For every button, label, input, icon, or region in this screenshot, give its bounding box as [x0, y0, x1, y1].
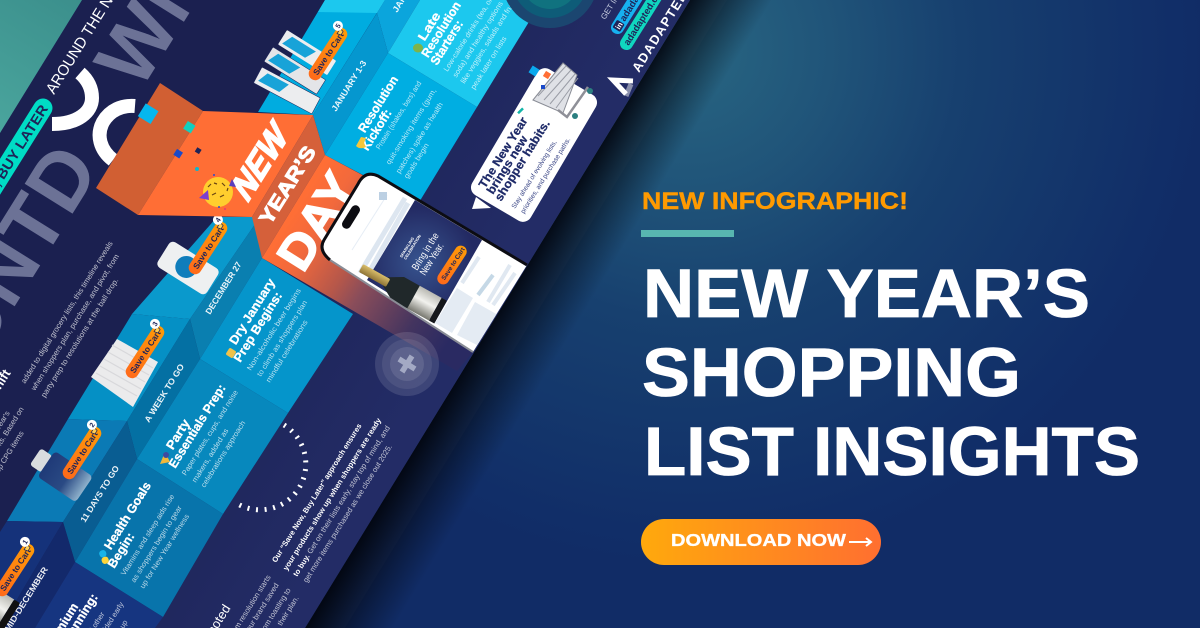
main headline: LIST INSIGHTS — [644, 413, 1140, 490]
panel: party essentials prep: Paper plates, cups, and noise — [180, 388, 240, 477]
teal divider — [641, 230, 734, 237]
phone right content — [435, 257, 515, 350]
save to cart tag 3: 3 — [152, 321, 160, 328]
speech bubble callout — [468, 65, 600, 225]
champagne bottle — [359, 264, 447, 324]
confetti on banner — [138, 103, 202, 171]
date labels: 11 DAYS TO GO — [78, 463, 121, 524]
panel: dry january prep: Non-alcoholic beer begins — [245, 286, 303, 372]
icon: product sachets — [254, 30, 336, 114]
phone ad headline second line: New Year. — [418, 241, 447, 278]
intro paragraph: party prep to resolutions at the ball drop. — [39, 276, 120, 399]
panel: resolution kickoff: quit-smoking items (gum, — [384, 87, 438, 166]
panel: party essentials prep — [137, 359, 288, 514]
save to cart tag 2: 2 — [89, 422, 97, 429]
panel: dry january prep: mindful celebrations — [264, 318, 310, 384]
download now button — [641, 519, 881, 565]
diagonal light band — [305, 0, 727, 628]
panel: premium planning — [35, 562, 163, 628]
download now button: DOWNLOAD NOW — [671, 530, 846, 550]
big countdown title — [0, 0, 228, 475]
closing paragraph: Our “Save Now, Buy Later” approach ensures — [270, 422, 364, 564]
icon: plate stack — [91, 339, 158, 407]
closing paragraph: to buy. Get on their lists early, stay top of mind, and — [291, 424, 392, 578]
panel: health goals begin: Vitamins and sleep aids rise — [119, 493, 176, 577]
promoted paragraph — [226, 573, 301, 628]
panel: late resolution starters: Late — [415, 10, 444, 43]
panel: party essentials prep: Party — [163, 417, 193, 452]
phone ad brand mark: CELEBRATION — [403, 234, 422, 261]
phone navy ad panel — [367, 200, 482, 322]
closing paragraph: get more items purchased as we close out 2025. — [301, 443, 394, 584]
icon: arrow — [849, 538, 871, 546]
panel: party essentials prep: Essentials Prep: — [166, 382, 229, 471]
speech bubble callout: brings new — [484, 133, 531, 197]
save to cart tag 5: 5 — [335, 23, 343, 30]
panel: resolution kickoff: Protein (shakes, bars) and — [374, 79, 423, 151]
main headline: NEW YEAR’S — [643, 255, 1090, 332]
banner word NEW: NEW — [227, 112, 294, 210]
closing paragraph: your products show up when shoppers are ready — [281, 416, 383, 572]
panel: resolution kickoff: patches) spike as health — [394, 101, 445, 175]
plus button — [375, 332, 439, 396]
panel: late resolution starters: peak later on lists — [469, 34, 509, 91]
speech bubble callout: priorities, and purchase paths. — [520, 137, 572, 215]
phone lower edge — [330, 260, 473, 352]
dashed ring arc — [236, 425, 306, 510]
teal header corner — [0, 0, 82, 133]
promoted paragraph: their plan. — [275, 594, 301, 627]
icon: champagne product — [0, 594, 20, 628]
save to cart tag 5 — [308, 20, 348, 80]
banner word YEAR'S: YEAR’S — [256, 142, 321, 229]
phone page copy lines — [352, 192, 408, 276]
speech bubble callout: Stay ahead of evolving lists, — [511, 139, 559, 210]
save to cart tag 4: 4 — [215, 217, 223, 224]
date labels: DECEMBER 27 — [203, 260, 244, 316]
save to cart tag 5: Save to Cart — [311, 30, 346, 77]
panel: late resolution starters: like veggies, salads and fruit — [459, 0, 517, 85]
intro paragraph: added to digital grocery lists, this timeline reveals — [19, 239, 115, 385]
panel: resolution kickoff: Kickoff: — [358, 107, 395, 153]
main headline: SHOPPING — [642, 334, 1021, 411]
panel: late resolution starters: Starters: — [428, 18, 466, 68]
icon: party face emoji — [199, 174, 236, 210]
phone notch — [340, 204, 362, 230]
adadapted chevron logo — [613, 80, 633, 96]
infographic page tilted — [0, 0, 691, 628]
main headline — [642, 255, 1140, 490]
panel: resolution kickoff — [325, 53, 477, 204]
icon: vitamin bottle — [30, 449, 92, 501]
clock O of countdown — [52, 73, 135, 160]
panel: party essentials prep: makers, added as — [190, 426, 231, 484]
panel: health goals begin: Begin: — [105, 530, 137, 571]
save to cart tag 1: 1 — [22, 539, 30, 546]
panel: dry january prep — [200, 258, 353, 413]
phone frame edge — [322, 174, 527, 265]
save to cart tag 2: Save to Cart — [65, 429, 100, 476]
save to cart tag 4: Save to Cart — [191, 224, 226, 271]
phone mockup — [322, 174, 527, 352]
speech bubble callout: The New Year — [476, 114, 531, 191]
navy page body — [0, 0, 690, 628]
eyebrow: new infographic: NEW INFOGRAPHIC! — [642, 188, 908, 215]
panel: dry january prep: to climb as shoppers plan — [255, 299, 309, 378]
phone save to cart tag: Save to Cart — [440, 246, 467, 282]
orange new year's day banner — [96, 83, 449, 358]
intro paragraph: when shoppers plan, purchase, and pivot, from — [29, 252, 121, 393]
phone save to cart tag — [435, 243, 469, 287]
panel: health goals begin: as shoppers begin to gear — [129, 503, 184, 584]
date labels — [2, 0, 429, 628]
save to cart tag 2 — [62, 420, 102, 480]
linkedin pill: in — [614, 20, 625, 31]
save now buy later pill — [0, 98, 52, 195]
panel: dry january prep: Prep Begins: — [231, 289, 285, 365]
phone ad brand mark: SPARKLING — [399, 236, 415, 259]
panel: resolution kickoff: goals begin — [402, 141, 431, 180]
icon: product can — [157, 242, 219, 294]
panel: health goals begin: up for New Year wellness — [138, 512, 191, 590]
timeline column: product rows — [0, 0, 385, 628]
save to cart tag 3: Save to Cart — [128, 328, 163, 375]
date labels: JANUARY 1-3 — [329, 58, 369, 113]
panel: resolution kickoff: Resolution — [355, 73, 401, 135]
icon: shopping cart — [517, 63, 593, 119]
date labels: A WEEK TO GO — [142, 362, 186, 424]
save to cart tag 3 — [126, 318, 164, 378]
panel: dry january prep: Dry January — [226, 276, 278, 347]
infographic drop shadow — [305, 0, 800, 628]
phone ad headline: Bring in the — [410, 231, 442, 273]
panel: party essentials prep: celebrations approach — [199, 419, 247, 489]
speech bubble callout: shopper habits. — [492, 117, 553, 204]
panel: late resolution starters — [388, 0, 538, 107]
footer rings — [502, 0, 598, 28]
banner word DAY: DAY — [267, 164, 367, 280]
timeline column: date strips — [0, 0, 420, 628]
panel: health goals begin — [75, 459, 223, 617]
panel: health goals begin: Health Goals — [101, 479, 154, 552]
panel: late resolution starters: soda) and healthy options — [451, 0, 505, 79]
linkedin pill — [609, 0, 657, 36]
